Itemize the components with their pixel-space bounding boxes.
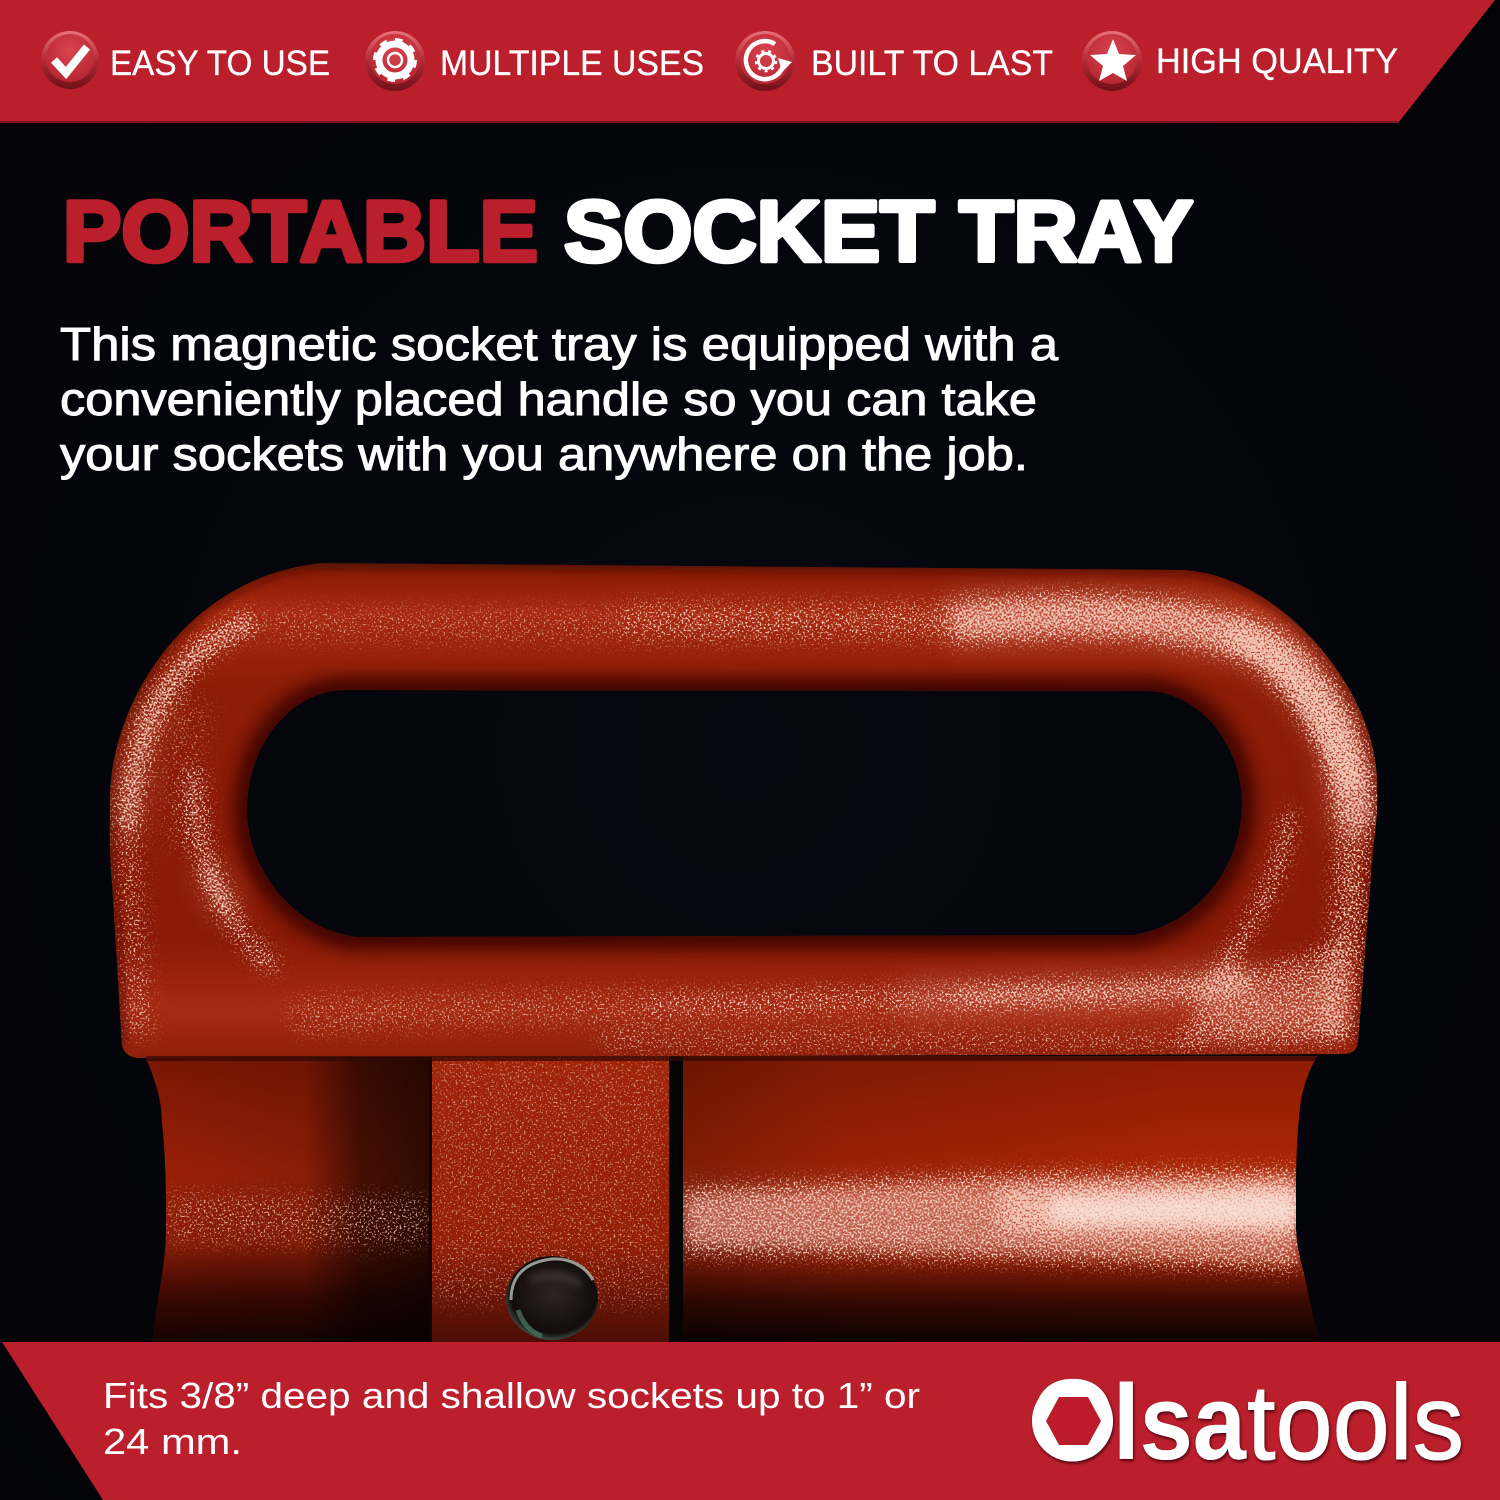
- fit note text: 24 mm.: [103, 1421, 242, 1462]
- icon: gear with circular arrow: [735, 31, 795, 91]
- badge: built to last: [735, 31, 1053, 91]
- logo: Olsatools: [1030, 1355, 1464, 1485]
- description text block: your sockets with you anywhere on the job.: [60, 428, 1028, 480]
- gap between strap and right panel: [669, 1058, 683, 1342]
- icon: gear: [365, 31, 425, 91]
- handle: [100, 555, 1390, 1065]
- label: multiple uses: MULTIPLE USES: [440, 44, 704, 83]
- handle soft highlights: [128, 616, 1355, 1015]
- description text block: conveniently placed handle so you can take: [60, 373, 1037, 425]
- logo: Olsatools: O: [1030, 1355, 1116, 1485]
- description text block: This magnetic socket tray is equipped with a: [60, 318, 1058, 370]
- title: PORTABLE: [63, 184, 538, 280]
- rivet: [506, 1256, 598, 1340]
- top banner: [0, 0, 1495, 123]
- title: SOCKET TRAY: [564, 184, 1193, 280]
- handle shading: [110, 563, 1377, 1045]
- fit note text: [103, 1375, 920, 1462]
- bottom banner: [2, 1342, 1500, 1500]
- title: [63, 184, 1193, 280]
- product photo: red tray handle: [100, 555, 1390, 1342]
- logo: Olsatools: tools: [1247, 1362, 1464, 1482]
- description text block: [60, 318, 1058, 480]
- fit note text: Fits 3/8” deep and shallow sockets up to 1” or: [103, 1375, 920, 1416]
- tray body: right panel: [683, 1056, 1323, 1342]
- handle speckle highlights: [128, 616, 1355, 1054]
- badge: high quality: [1082, 31, 1398, 91]
- logo: Olsatools: lsa: [1113, 1362, 1247, 1482]
- tray body: centre strap: [432, 1056, 669, 1342]
- icon: star: [1082, 31, 1142, 91]
- label: high quality: HIGH QUALITY: [1156, 42, 1398, 81]
- label: built to last: BUILT TO LAST: [811, 44, 1053, 83]
- badge: multiple uses: [365, 31, 704, 91]
- badge: easy to use: [41, 31, 330, 89]
- icon: check mark: [41, 31, 99, 89]
- shadow under handle: [146, 1056, 1316, 1061]
- seam left of strap: [429, 1058, 432, 1342]
- tray body: left panel: [140, 1056, 432, 1342]
- label: easy to use: EASY TO USE: [110, 44, 330, 83]
